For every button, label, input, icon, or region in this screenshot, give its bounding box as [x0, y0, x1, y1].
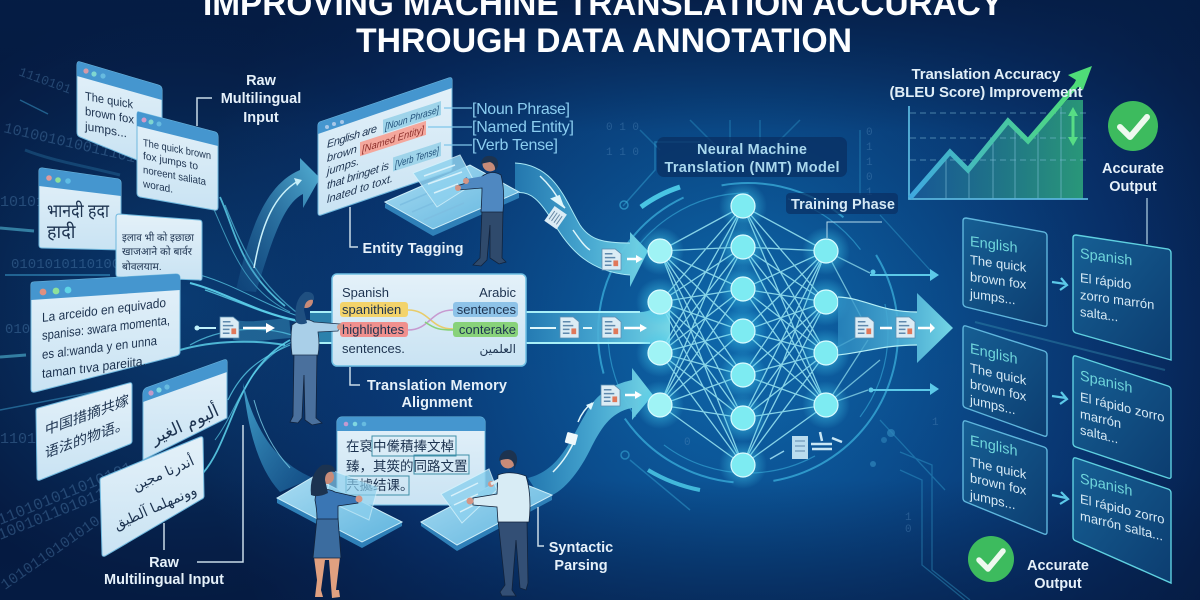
output: Spanish 2: salta...: [1080, 422, 1118, 446]
tag connectors and labels: [428, 101, 574, 154]
background streaks left: [0, 100, 130, 410]
output: English 3: [963, 421, 1047, 534]
document card: that bringet is: [327, 160, 389, 192]
label: entity tagging: Entity Tagging: [362, 241, 464, 257]
binary columns near the model: 1: [866, 157, 873, 169]
chart title: [890, 66, 1082, 101]
card: Hindi 2: बोवलयाम.: [122, 260, 162, 273]
label: syntactic parsing: Parsing: [554, 558, 608, 574]
label: raw multilingual input bottom: Raw: [149, 555, 180, 571]
icon: check accurate output bottom: Accurate: [1027, 558, 1089, 574]
chart grid: [909, 106, 1088, 199]
document card: lnated to toxt.: [327, 173, 393, 206]
binary columns near the model: 0: [684, 437, 691, 449]
panel: translated output cards: [963, 218, 1171, 583]
document card: brown: [327, 144, 357, 165]
output: English 2: jumps...: [969, 392, 1015, 417]
binary columns near the model: 1: [866, 142, 873, 154]
tag connectors and labels: [Noun Phrase]: [472, 101, 570, 118]
card: Hindi 2: इलाव भी को इछाछा: [122, 231, 194, 244]
document card: English are: [327, 123, 377, 151]
card: English 2: [137, 112, 218, 210]
document card: [318, 78, 452, 215]
person: woman with tablet: [311, 465, 362, 598]
card: Chinese: 语法的物语。: [45, 415, 129, 462]
binary code background left: 1101: [0, 431, 36, 448]
card: Arabic 2: أندرنا مجين: [129, 451, 197, 495]
alignment card: [332, 274, 526, 366]
label: training phase: Training Phase: [791, 197, 895, 213]
alignment card: Spanish: [342, 285, 389, 300]
output: English 2: English: [970, 341, 1018, 368]
divider glow: [975, 322, 1165, 370]
output: Spanish 2: Spanish: [1080, 368, 1132, 397]
binary columns near the model: 0 1 0: [606, 122, 639, 134]
binary code background left: 010: [5, 322, 30, 338]
card: Chinese: [36, 383, 132, 480]
label: NMT model: Neural Machine: [697, 142, 807, 158]
icon: check accurate output top: Accurate: [1102, 161, 1164, 177]
double arrow: [1068, 107, 1078, 146]
icon: check accurate output top: [1102, 101, 1164, 244]
label: translation memory alignment: Alignment: [402, 395, 473, 411]
label: syntactic parsing: [538, 507, 613, 574]
circuit traces and rings around the neural network: [598, 120, 970, 600]
label: raw multilingual input top: Input: [243, 110, 279, 126]
document card: [Verb Tense]: [394, 146, 440, 171]
trend line: [910, 66, 1092, 198]
output: English 3: brown fox: [970, 470, 1027, 498]
chinese document card: 臻，其筴的同路文置: [346, 458, 468, 474]
label: entity tagging: [350, 207, 464, 257]
output: Spanish 2: [1073, 356, 1171, 478]
output: English 1: English: [970, 234, 1018, 257]
document card: [Noun Phrase]: [384, 105, 440, 133]
card: English 1: [77, 62, 162, 160]
input doc and arrow: [194, 317, 275, 338]
alignment card: Arabic: [479, 285, 516, 300]
label: raw multilingual input bottom: [104, 425, 243, 588]
label: raw multilingual input top: Raw: [246, 73, 277, 89]
card: Arabic 2: وونمهلما آلطيق: [111, 482, 199, 533]
output: English 3: English: [970, 433, 1018, 460]
binary code background left: 10100101001110101: [2, 120, 155, 171]
panel: syntactic parsing: [277, 417, 613, 598]
binary code background left: 1010110101010: [0, 513, 104, 594]
card: Hindi 2: खाजआने को बार्वर: [122, 245, 193, 258]
chinese document card: 在裒中儯積捧文棹: [346, 438, 454, 454]
neural machine translation model: [636, 137, 898, 489]
binary columns near the model: 1: [866, 187, 873, 199]
alignment card: conterake: [459, 322, 516, 337]
alignment card: sentences: [457, 302, 516, 317]
card: English 1: The quick: [85, 89, 134, 112]
document card: jumps.: [325, 156, 359, 179]
output: English 1: [963, 218, 1047, 326]
output: English 2: [963, 326, 1047, 436]
card: English 2: worad.: [142, 178, 173, 196]
binary columns near the model: 0: [866, 127, 873, 139]
binary code background left: 0101010110100: [11, 257, 120, 273]
title: [203, 0, 1003, 60]
binary columns near the model: 1 1 0: [606, 147, 639, 159]
card: English 2: The quick brown: [143, 137, 211, 162]
label: raw multilingual input top: [197, 73, 301, 126]
binary code background left: 1110101: [17, 65, 73, 98]
label: NMT model: Translation (NMT) Model: [664, 160, 840, 176]
output: Spanish 1: zorro marrón: [1080, 287, 1154, 312]
output arrow from model: [838, 293, 953, 363]
card: Hindi 1: हादी: [47, 222, 76, 242]
output: Spanish 3: [1073, 458, 1171, 583]
chart title: (BLEU Score) Improvement: [890, 84, 1082, 101]
ribbon: entity tagging to model: [515, 163, 648, 287]
label: training phase: [786, 193, 898, 238]
card: Arabic 1: ألبوم الغير: [146, 399, 222, 449]
arrows English to Spanish: [1052, 278, 1068, 504]
output: English 2: brown fox: [970, 376, 1027, 404]
label: NMT model: [657, 137, 847, 177]
label: raw multilingual input top: Multilingual: [221, 91, 301, 107]
network connections: [660, 206, 880, 465]
chart title: Translation Accuracy: [912, 66, 1061, 83]
label: translation memory alignment: Translation Memory: [367, 378, 507, 394]
chart area: [910, 100, 1083, 199]
card: Spanish: taman tıva pareiita.: [42, 353, 146, 381]
platform right: [421, 469, 552, 551]
output: Spanish 1: salta...: [1080, 304, 1118, 324]
alignment card: sentences.: [342, 341, 405, 356]
binary columns near the model: 0: [905, 524, 912, 536]
input layer nodes: [636, 227, 684, 429]
card: Spanish: [31, 274, 180, 392]
platform left: [277, 470, 402, 548]
chart: BLEU score improvement: [890, 66, 1092, 199]
chinese document card: [337, 417, 485, 505]
card: English 1: brown fox: [85, 104, 134, 127]
ribbon: syntactic parsing to model: [528, 368, 653, 497]
arrow: flow from input up to entity tagging: [236, 158, 320, 292]
tag connectors and labels: [Verb Tense]: [472, 137, 558, 154]
icon: check accurate output bottom: [968, 536, 1089, 592]
card: Hindi 2: [116, 214, 202, 280]
card: English 2: fox jumps to: [143, 150, 198, 173]
output: Spanish 3: marrón salta...: [1080, 508, 1163, 544]
alignment card: highlightes: [342, 322, 405, 337]
output: English 1: The quick: [970, 252, 1027, 275]
card: Hindi 1: [39, 168, 121, 250]
person: man with tablet: [466, 450, 530, 596]
panel: entity tagging: [318, 78, 574, 266]
ribbon: translation memory to model: [310, 300, 670, 350]
card: English 2: noreent saliata: [143, 164, 206, 188]
person: annotator man: [455, 156, 506, 266]
card: Spanish: es al:wanda y en unna: [42, 333, 158, 362]
card: Spanish: spanisə: ɜwara momenta,: [42, 312, 170, 343]
output layer nodes: [802, 227, 850, 429]
card: Arabic 2: [100, 437, 204, 556]
output: English 3: jumps...: [969, 487, 1015, 512]
binary columns near the model: 0: [866, 172, 873, 184]
alignment card: spanithien: [342, 302, 401, 317]
data streams converging from input cards: [180, 197, 300, 473]
icon: check accurate output top: Output: [1109, 179, 1157, 195]
tag connectors and labels: [Named Entity]: [472, 119, 574, 136]
label: raw multilingual input bottom: Multilingual Input: [104, 572, 224, 588]
output: Spanish 3: El rápido zorro: [1080, 491, 1164, 527]
label: syntactic parsing: Syntactic: [549, 540, 613, 556]
card: Chinese: 中国措摘共嫁: [45, 391, 129, 439]
icon: check accurate output bottom: Output: [1034, 576, 1082, 592]
output: Spanish 2: marrón: [1080, 406, 1121, 431]
panel: translation memory alignment: [290, 274, 526, 425]
title: THROUGH DATA ANNOTATION: [356, 22, 852, 60]
output: Spanish 3: Spanish: [1080, 471, 1132, 500]
document card: [Named Entity]: [361, 124, 425, 156]
binary columns near the model: 1: [932, 417, 939, 429]
binary columns near the model: 1: [905, 512, 912, 524]
binary code background left: [0, 65, 155, 594]
panel: raw input cards: [31, 62, 227, 556]
card: Hindi 1: भानदी हदा: [47, 201, 109, 221]
output: Spanish 1: [1073, 235, 1171, 360]
output: English 2: The quick: [970, 360, 1027, 388]
card: Spanish: La arceido en equivado: [42, 295, 166, 325]
output: Spanish 2: El rápido zorro: [1080, 389, 1164, 425]
chinese document card: 兲㨿结课。: [346, 478, 414, 493]
tablet platform: [385, 155, 519, 236]
output: English 1: brown fox: [970, 269, 1027, 292]
output: English 1: jumps...: [969, 286, 1015, 307]
card: Arabic 1: [143, 360, 227, 460]
small training documents icon: [770, 432, 842, 459]
binary columns near the model: [606, 122, 939, 536]
card: English 1: jumps...: [84, 119, 127, 140]
person: woman pointing: [290, 292, 343, 425]
alignment card: العلمين: [480, 342, 516, 357]
arrow: flow from input to syntactic parsing: [243, 383, 313, 492]
label: translation memory alignment: [350, 367, 507, 411]
output branch arrows: [868, 269, 939, 395]
output: English 3: The quick: [970, 454, 1027, 482]
output: Spanish 1: Spanish: [1080, 246, 1132, 269]
output: Spanish 1: El rápido: [1080, 270, 1131, 292]
binary code background left: 10101: [0, 194, 45, 211]
hidden layer nodes: [719, 182, 767, 489]
